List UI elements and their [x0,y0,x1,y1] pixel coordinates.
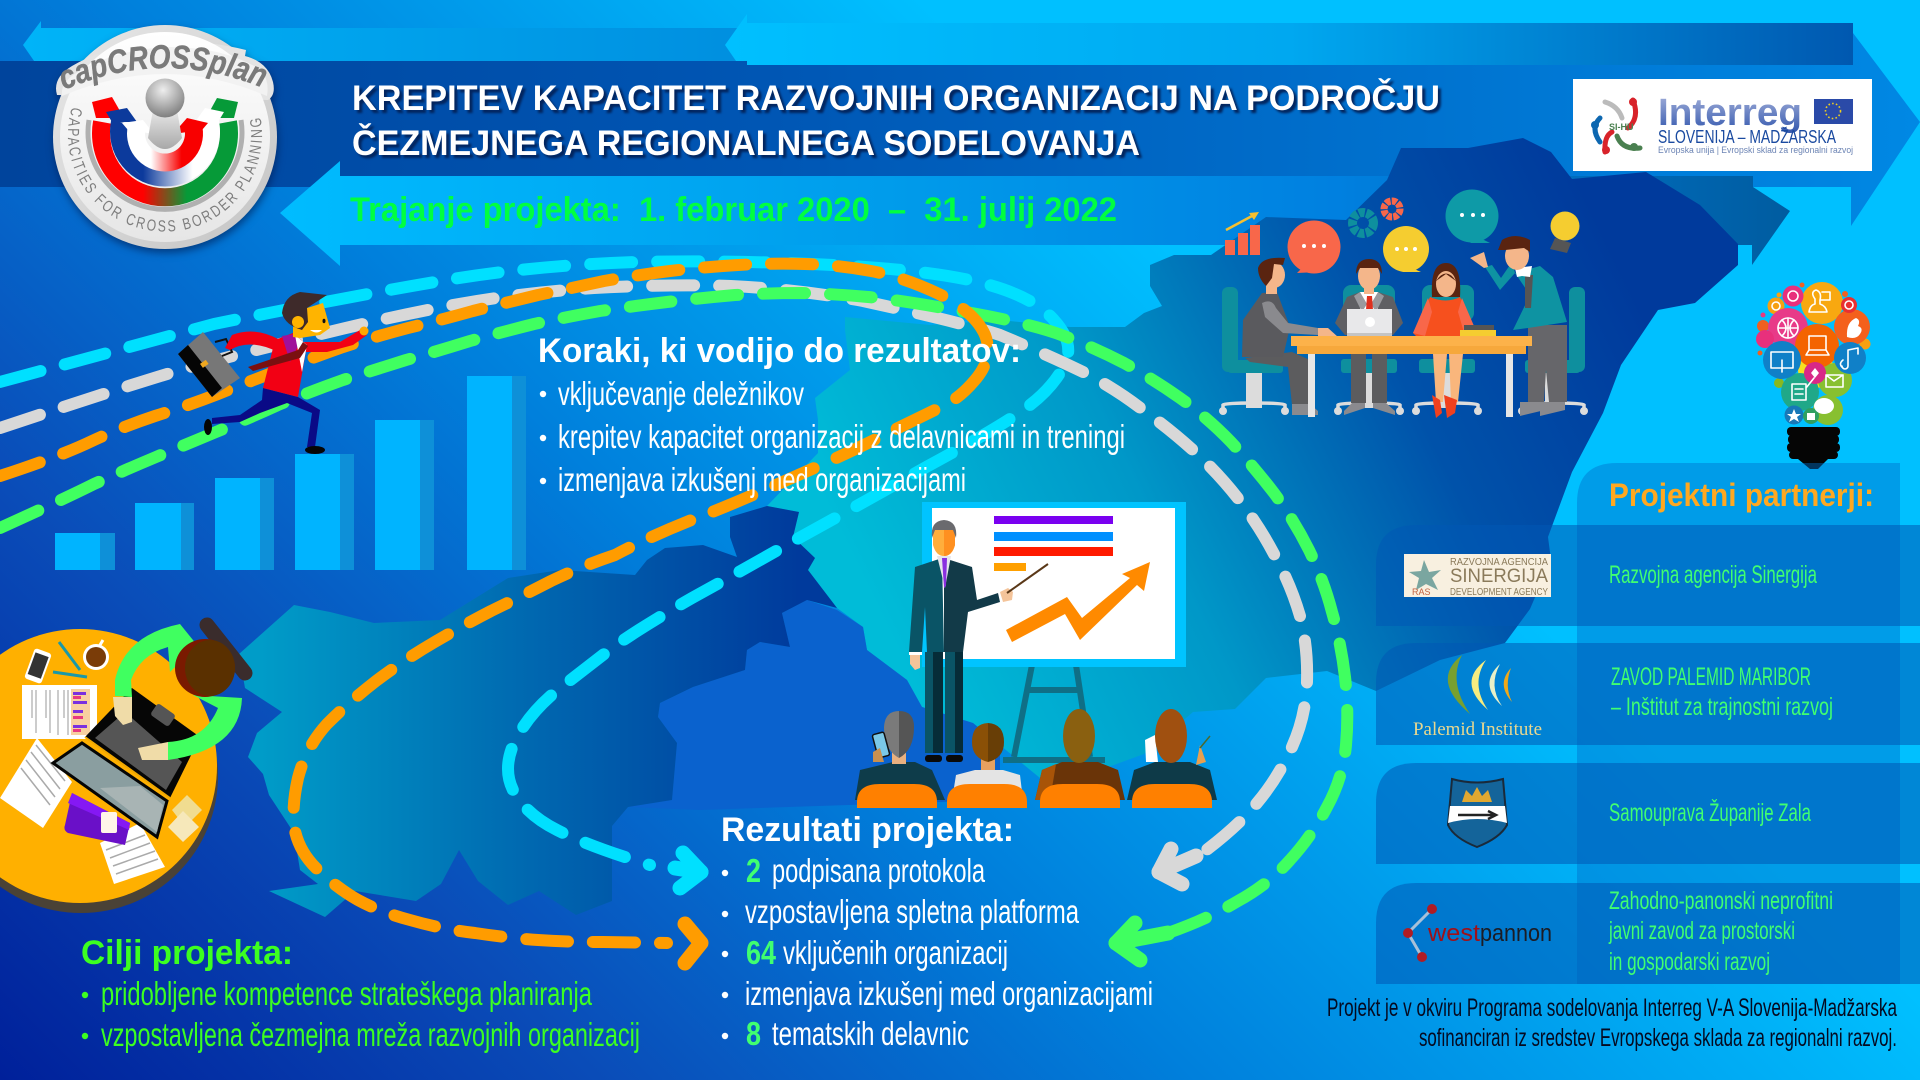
illustration: team meeting [1219,190,1588,418]
pencils [53,642,87,677]
partner name: Zala: Samouprava Županije Zala [1609,798,1811,827]
purple folder [64,793,130,845]
table [1291,336,1532,417]
list: steps: krepitev kapacitet organizacij z delavnicami in treningi [558,418,1125,455]
logo: Sinergija [1404,554,1551,598]
title [352,78,1440,163]
list: results: 64 [746,934,777,971]
list: goals [82,975,640,1053]
icon: yellow speech bubble [1383,226,1429,272]
logo: Westpannon [1403,904,1552,962]
person: man left [1242,258,1338,415]
coffee cup [83,640,109,670]
sticky notes [168,795,202,842]
logo: Sinergija: SINERGIJA [1450,566,1548,587]
list: steps [540,375,1125,498]
map: cross-border region upper right [767,138,1738,778]
logo: Westpannon: west [1427,920,1480,947]
laptop [53,688,200,837]
list: results: izmenjava izkušenj med organizacijami [745,975,1153,1012]
illustration: presenter and whiteboard [855,502,1217,808]
logo: Interreg Slovenija-Madžarska: Interreg [1658,92,1802,134]
text block: project goals [81,934,640,1053]
icon: idea bulb [1550,212,1580,253]
dashed arrow: cyan path to results [0,261,1068,888]
heading: steps: Koraki, ki vodijo do rezultatov: [538,332,1021,370]
icon: red speech bubble [1288,220,1340,274]
dashed arrow: orange path to results [0,264,988,963]
person seen from above [113,624,242,760]
list: goals: pridobljene kompetence strateškega planiranja [101,975,592,1012]
documents [0,685,165,884]
phone [24,648,52,684]
project duration: Trajanje projekta: 1. februar 2020 – 31. julij 2022 [350,191,1117,229]
logo: Zala county coat of arms [1448,779,1507,847]
heading: results: Rezultati projekta: [721,811,1014,849]
person: presenter [909,520,1048,762]
list: steps: vključevanje deležnikov [558,375,804,412]
icon: growth chart [1225,212,1260,255]
partner name: Westpannon: javni zavod za prostorski [1608,917,1795,945]
list: results: tematskih delavnic [772,1015,969,1052]
trousers [212,388,320,447]
list: goals: vzpostavljena čezmejna mreža razvojnih organizacij [101,1016,640,1053]
dashed arrow: grey path to results [0,285,1307,884]
whiteboard stand [1003,665,1105,760]
partner name: Westpannon: Zahodno-panonski neprofitni [1609,887,1833,915]
heading: goals: Cilji projekta: [81,934,293,972]
list: results: 8 [746,1015,761,1052]
arrow: top right [725,14,1853,77]
map: blue region centre [628,600,1000,810]
partner name: Palemid: – Inštitut za trajnostni razvoj [1611,693,1833,721]
logo: capCROSSplan badge [50,24,282,258]
person: standing man [1470,236,1567,416]
partner name: Palemid [1611,663,1833,721]
icon: teal speech bubble [1446,190,1498,243]
person: woman [1413,263,1496,418]
person: man with laptop [1335,259,1403,415]
list: results: vzpostavljena spletna platforma [745,893,1079,930]
chairs [1222,285,1585,373]
list: results: podpisana protokola [772,852,985,889]
partner name: Sinergija: Razvojna agencija Sinergija [1609,561,1817,589]
list: results: vključenih organizacij [783,934,1008,971]
partner name: Westpannon [1608,887,1833,976]
title: ČEZMEJNEGA REGIONALNEGA SODELOVANJA [352,123,1140,163]
map: Slovenia lower left [239,506,837,917]
audience [855,709,1217,808]
icon: gears [1352,201,1400,234]
logo: Sinergija: RAS [1412,587,1431,597]
jacket [263,333,307,397]
list: results: 2 [746,852,761,889]
whiteboard [922,502,1186,667]
icon: light bulb of colourful icons [1756,282,1870,469]
logo: capCROSSplan badge: capCROSSplan [60,44,266,88]
illustration: desk with person at laptop [0,624,245,913]
partner name: Westpannon: in gospodarski razvoj [1609,948,1770,976]
logo: Interreg Slovenija-Madžarska: SLOVENIJA – MADŽARSKA [1658,127,1836,147]
arrow: top left [23,21,740,71]
logo: Interreg Slovenija-Madžarska: SI-HU [1609,122,1634,132]
panel column backdrop [1577,463,1900,984]
logo: Sinergija: RAZVOJNA AGENCIJA [1450,557,1548,568]
office chair [207,625,245,673]
text block: steps to results [538,332,1125,498]
list: steps: izmenjava izkušenj med organizacijami [558,461,966,498]
panel: project partners [1376,463,1920,984]
footer note [1327,994,1897,1052]
icon details in white [1771,290,1862,422]
dashed arrow: green path to results [0,293,1347,960]
bar chart: growth steps [55,376,526,570]
list: results [722,852,1153,1052]
arrow: dark title band [0,33,1920,226]
logo: capCROSSplan badge: CAPACITIES FOR CROSS BORDER PLANNING [68,108,262,232]
head [293,303,330,338]
text block: project results [721,811,1153,1052]
briefcase [178,332,240,397]
bulb socket [1787,427,1840,469]
logo: Sinergija: DEVELOPMENT AGENCY [1450,586,1548,598]
illustration: running businessman [178,292,368,454]
title: KREPITEV KAPACITET RAZVOJNIH ORGANIZACIJ NA PODROČJU [352,78,1440,118]
desk [0,639,218,913]
logo: Palemid Institute [1413,655,1542,740]
heading: partners: Projektni partnerji: [1609,477,1874,513]
logo: Interreg Slovenija-Madžarska: Evropska unija | Evropski sklad za regionalni razvoj [1658,145,1853,156]
logo: Interreg Slovenija-Madžarska [1573,79,1872,171]
logo: Palemid Institute: Palemid Institute [1413,719,1542,740]
arrow: duration band [280,161,1790,266]
logo: Westpannon: pannon [1480,920,1552,947]
